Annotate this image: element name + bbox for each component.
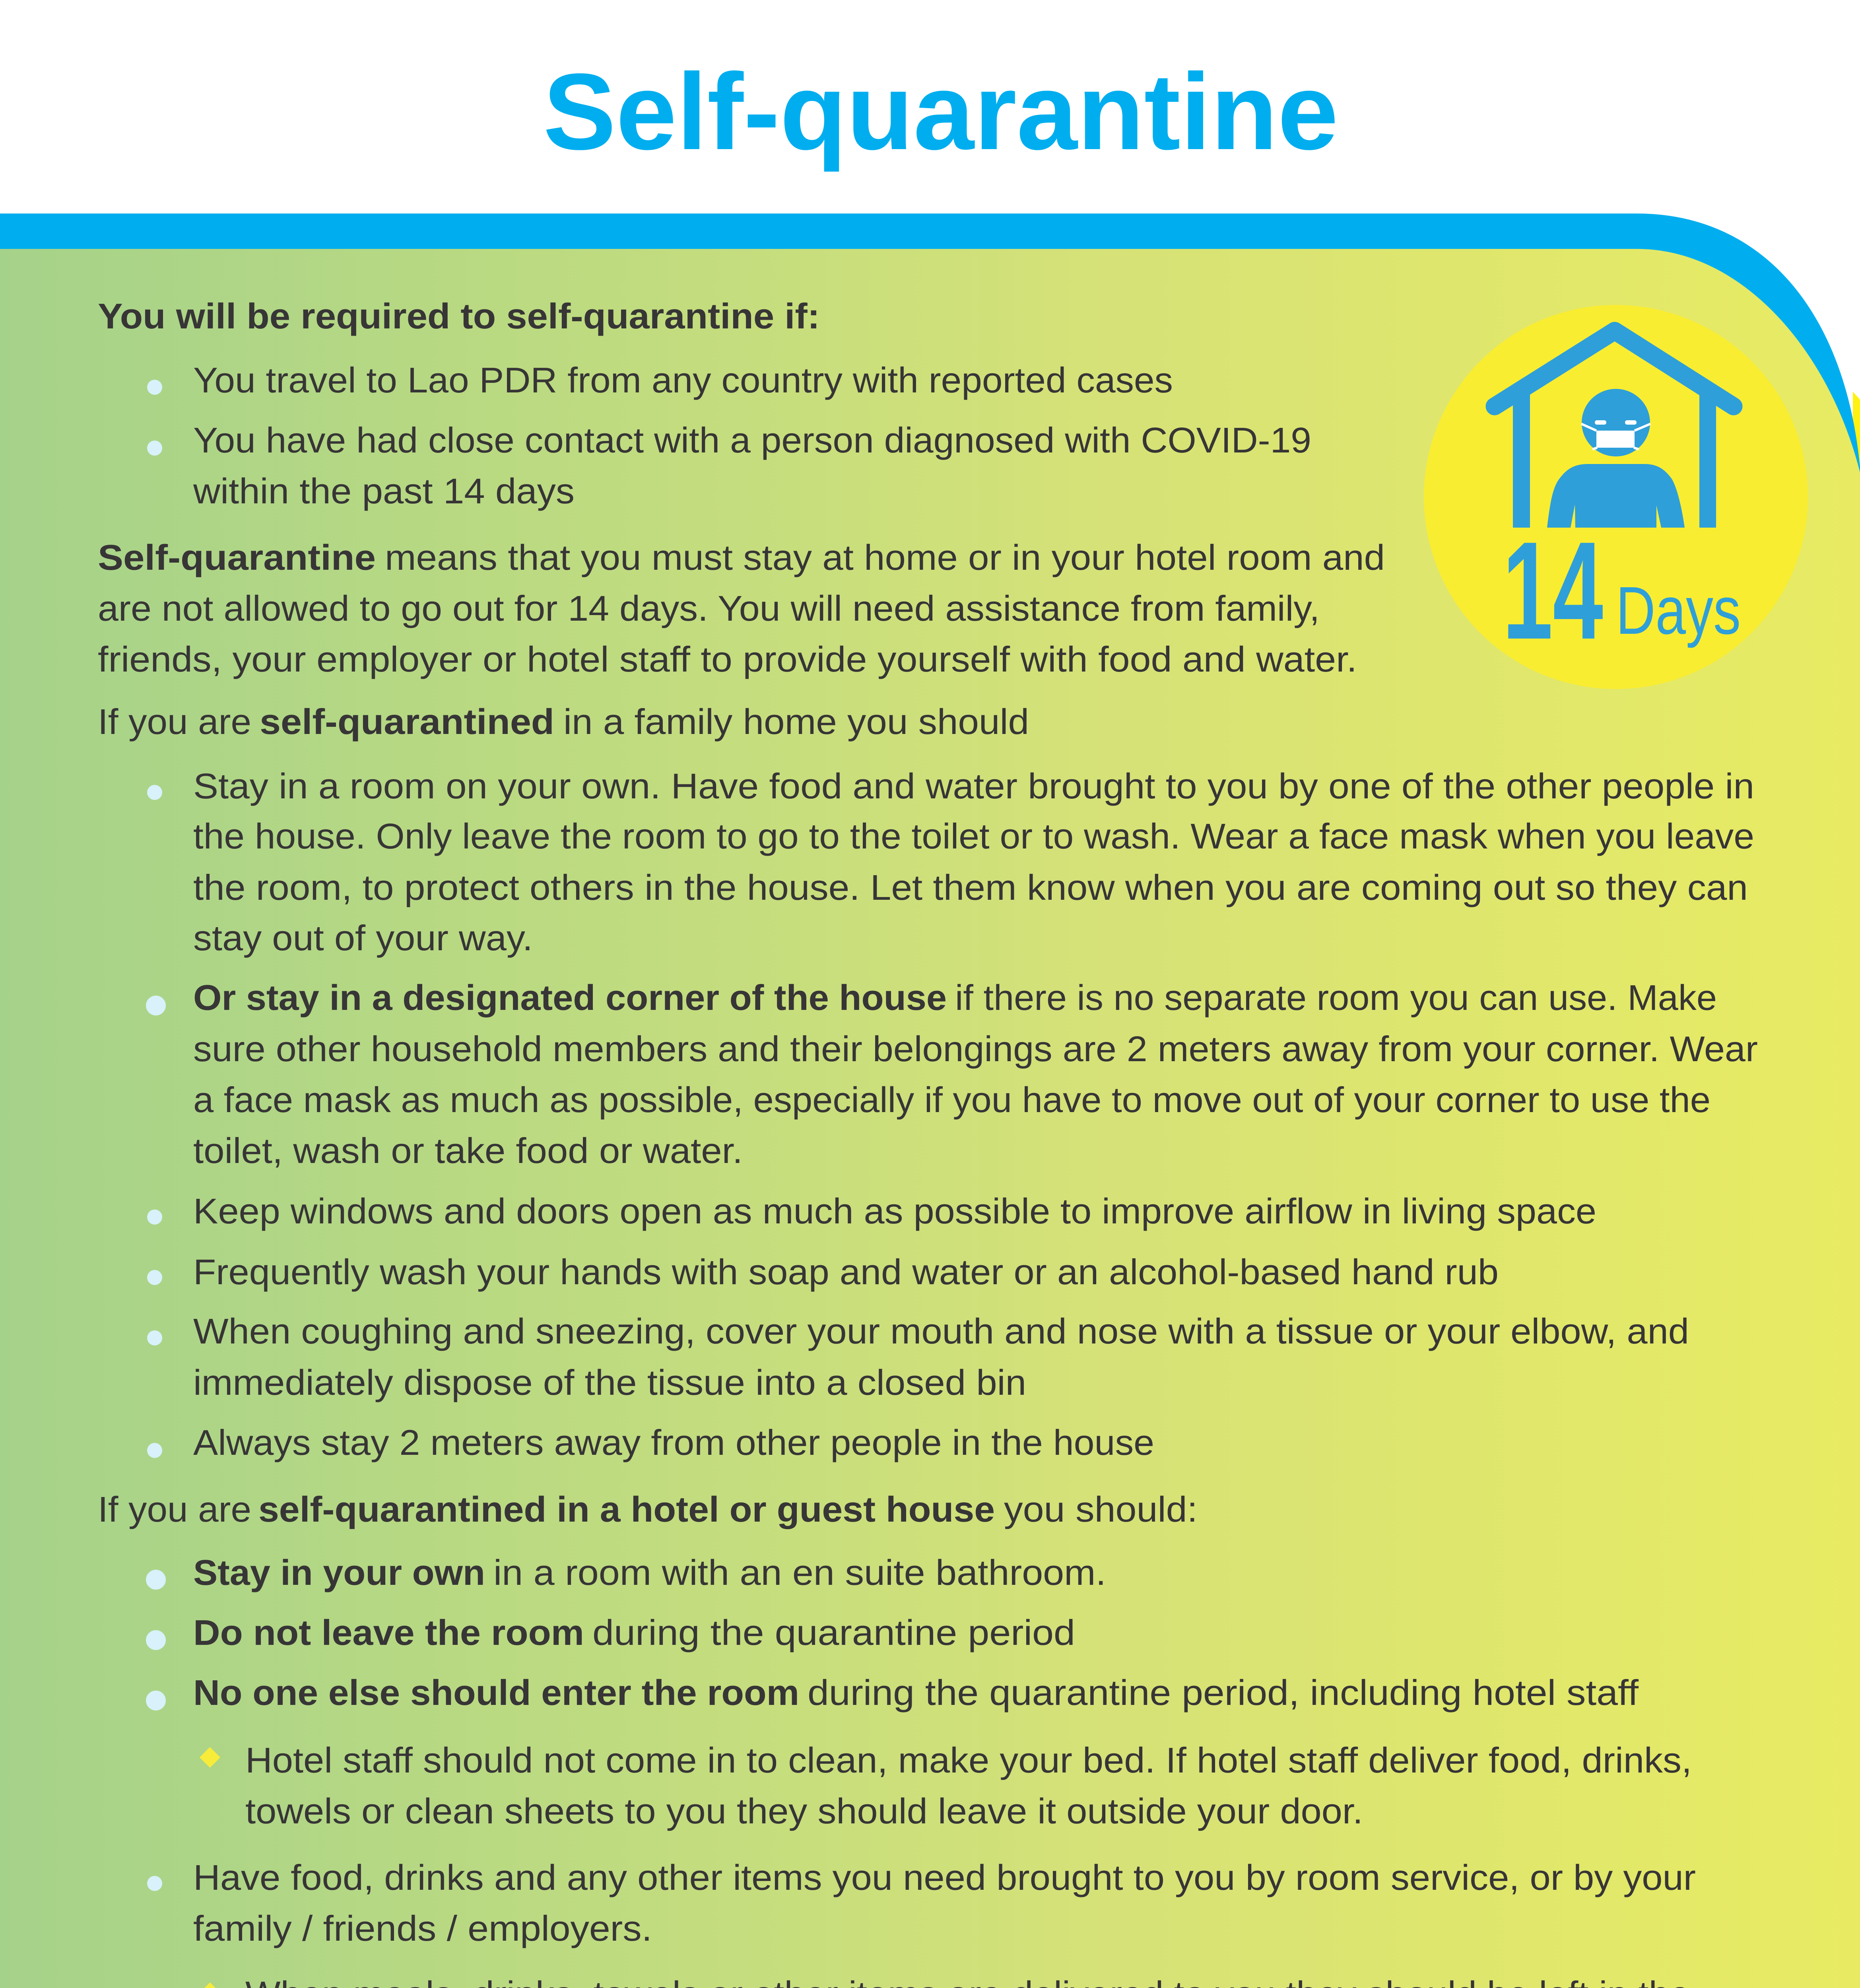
bullet: designated corner: a face mask as much as possible, especially if you have to move out of your corner to use the	[193, 1080, 1711, 1120]
bullet: designated corner: sure other household members and their belongings are 2 meters away from your corner. Wear	[193, 1029, 1758, 1069]
heading: hotel or guest house: you should:	[1004, 1490, 1198, 1530]
bullet: coughing	[147, 1312, 1689, 1403]
bullet: own room: the house. Only leave the room to go to the toilet or to wash. Wear a face mask when you leave	[193, 817, 1754, 856]
bullet: own room: Stay in a room on your own. Have food and water brought to you by one of the other people in	[193, 767, 1754, 806]
heading: hotel or guest house: If you are	[98, 1490, 251, 1530]
bullet: designated corner: if there is no separate room you can use. Make	[955, 978, 1717, 1018]
sub-bullet: hotel staff	[200, 1741, 1692, 1831]
sub-bullet: hotel staff: Hotel staff should not come in to clean, make your bed. If hotel staff deliver food, drinks,	[245, 1741, 1692, 1780]
bullet: designated corner: toilet, wash or take food or water.	[193, 1131, 743, 1171]
title: Self-quarantine	[543, 51, 1338, 173]
bullet: close contact: You have had close contact with a person diagnosed with COVID-19	[193, 421, 1311, 460]
icon: masked person	[1547, 389, 1685, 528]
bullet: stay in your own room	[146, 1553, 1106, 1593]
list: family home instructions	[146, 767, 1758, 1463]
bullet: coughing: When coughing and sneezing, cover your mouth and nose with a tissue or your elbow, and	[193, 1312, 1689, 1351]
label: 14: 14	[1503, 513, 1604, 668]
bullet: do not leave: during the quarantine period	[592, 1613, 1075, 1653]
text block: definition of self-quarantine: are not allowed to go out for 14 days. You will need assistance from family,	[98, 589, 1320, 629]
label: Days: Days	[1616, 573, 1741, 648]
text block: definition of self-quarantine: Self-quarantine	[98, 538, 376, 578]
bullet: close contact	[147, 421, 1311, 511]
bullet: own room: stay out of your way.	[193, 918, 533, 958]
text block: who must self-quarantine	[98, 297, 1311, 511]
bullet: food and drinks: Have food, drinks and any other items you need brought to you by room service, or by your	[193, 1858, 1696, 1898]
icon: house	[1495, 331, 1734, 528]
bullet: stay in your own room: in a room with an en suite bathroom.	[493, 1553, 1106, 1593]
text block: definition of self-quarantine: means that you must stay at home or in your hotel room and	[385, 538, 1385, 578]
bullet: travel: You travel to Lao PDR from any country with reported cases	[193, 361, 1173, 400]
text block: definition of self-quarantine: friends, your employer or hotel staff to provide yourself with food and water.	[98, 640, 1357, 679]
sub-bullet: hotel staff: towels or clean sheets to you they should leave it outside your door.	[245, 1792, 1363, 1831]
bullet: distance: Always stay 2 meters away from other people in the house	[193, 1423, 1154, 1463]
bullet: do not leave	[146, 1613, 1075, 1653]
heading: You will be required to self-quarantine if:	[98, 297, 820, 336]
bullet: close contact: within the past 14 days	[193, 472, 575, 511]
bullet: stay in your own room: Stay in your own	[193, 1553, 485, 1593]
heading: family home: self-quarantined	[260, 702, 554, 742]
bullet: own room: the room, to protect others in the house. Let them know when you are coming out so they can	[193, 868, 1748, 908]
heading: hotel or guest house: self-quarantined in a hotel or guest house	[258, 1490, 995, 1530]
heading: hotel or guest house	[98, 1490, 1198, 1530]
heading: family home	[98, 702, 1029, 742]
bullet: no one else: during the quarantine period, including hotel staff	[808, 1673, 1639, 1713]
bullet: wash hands: Frequently wash your hands with soap and water or an alcohol-based hand rub	[193, 1252, 1499, 1292]
bullet: designated corner: Or stay in a designated corner of the house	[193, 978, 947, 1018]
list: hotel instructions	[146, 1553, 1755, 1988]
text block: definition of self-quarantine	[98, 538, 1385, 679]
bullet: windows: Keep windows and doors open as much as possible to improve airflow in living space	[193, 1192, 1596, 1231]
heading: family home: in a family home you should	[563, 702, 1029, 742]
bullet: no one else: No one else should enter the room	[193, 1673, 799, 1713]
bullet: no one else	[146, 1673, 1639, 1713]
bullet: own room	[147, 767, 1754, 958]
bullet: coughing: immediately dispose of the tissue into a closed bin	[193, 1363, 1026, 1403]
bullet: designated corner	[146, 978, 1758, 1171]
bullet: food and drinks	[147, 1858, 1696, 1949]
bullet: food and drinks: family / friends / employers.	[193, 1909, 652, 1949]
heading: family home: If you are	[98, 702, 251, 742]
bullet: do not leave: Do not leave the room	[193, 1613, 584, 1653]
icon: 14 days self-quarantine house badge	[1424, 305, 1808, 689]
